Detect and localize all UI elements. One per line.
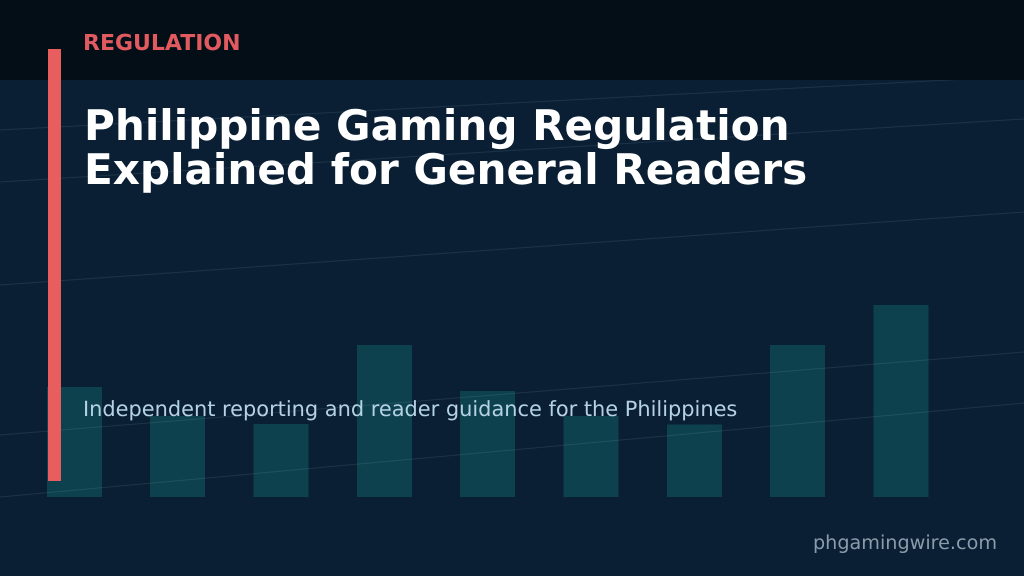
bar chart [47,305,928,497]
trend lines [0,76,1024,497]
source website: phgamingwire.com [813,531,997,554]
title: Explained for General Readers [84,145,807,194]
title [84,101,807,194]
subtitle: Independent reporting and reader guidance for the Philippines [83,397,737,421]
title: Philippine Gaming Regulation [84,101,790,150]
accent bar [48,49,61,481]
category label: REGULATION [83,31,241,56]
header band [0,0,1024,80]
